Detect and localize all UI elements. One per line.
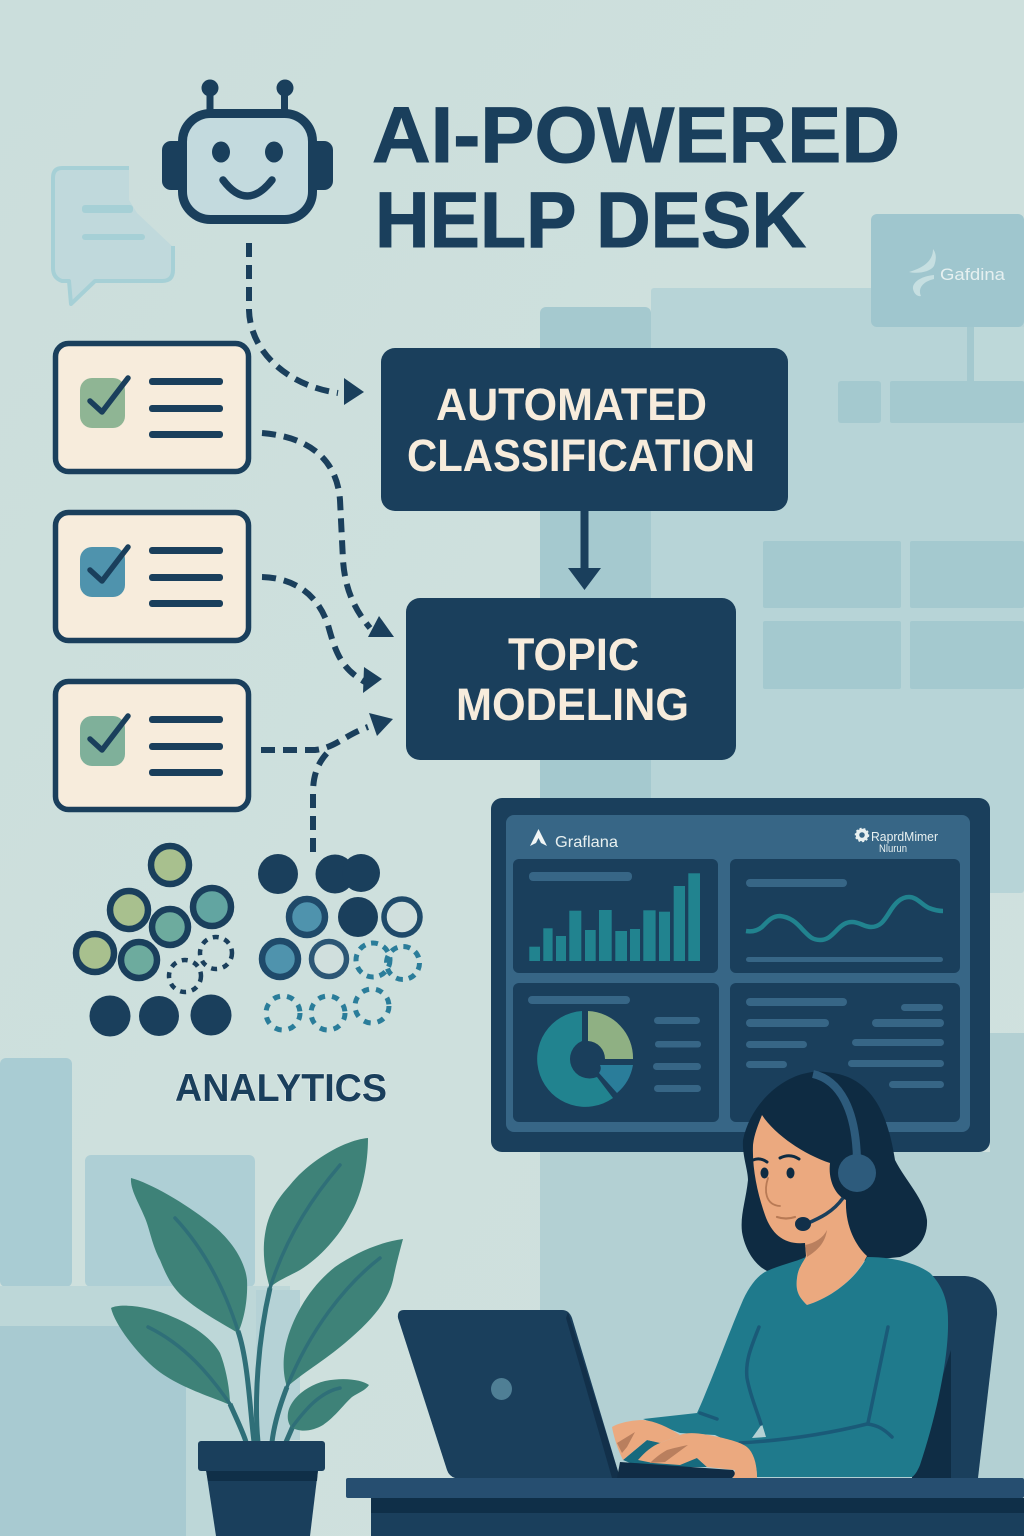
dashed arrow: card 2 to topic modeling: [262, 577, 382, 693]
dashed arrow: robot to automated classification: [249, 243, 364, 405]
dashboard monitor: [491, 798, 990, 1152]
dashed arrow: card 1 to topic modeling: [262, 433, 394, 637]
desk: [346, 1478, 1024, 1536]
shirt: [643, 1257, 948, 1477]
potted plant: [111, 1138, 403, 1536]
dashboard logo: Grafana: Graflana: [555, 834, 618, 851]
neck shadow: [805, 1230, 827, 1257]
shirt fold lines: [700, 1327, 892, 1443]
wall sign: Gafdina: Gafdina: [940, 265, 1006, 284]
dashboard logo: RapidMiner: [856, 828, 939, 855]
face and neck: [753, 1115, 867, 1305]
leaf veins: [148, 1165, 380, 1426]
box: automated classification: [381, 348, 788, 511]
leaves: [111, 1138, 403, 1431]
icon: faded chat bubble: [53, 168, 173, 304]
dashboard logo: RapidMiner: RaprdMimer: [871, 829, 939, 844]
ticket card 1: [56, 344, 248, 472]
ticket card 3: [56, 682, 248, 810]
panel: donut chart: [513, 983, 719, 1122]
dashed connector: analytics upward: [313, 751, 329, 852]
dashed arrow: card 3 to topic modeling: [261, 713, 393, 750]
gap under arm: [752, 1424, 766, 1438]
analytics cluster: left: [76, 846, 232, 1036]
dashboard logo: Grafana: [530, 829, 618, 851]
title: AI-POWERED: [372, 90, 900, 179]
headset: [795, 1074, 876, 1231]
pot: [198, 1441, 325, 1536]
panel: line chart: [730, 859, 960, 973]
hair: [742, 1072, 927, 1271]
title: HELP DESK: [375, 175, 806, 264]
box: topic modeling: MODELING: [456, 679, 689, 730]
label: analytics: ANALYTICS: [175, 1067, 387, 1110]
icon: robot head: [162, 80, 333, 220]
panel: bar chart: [513, 859, 718, 973]
dashboard logo: RapidMiner: Nlurun: [879, 843, 907, 855]
box: topic modeling: TOPIC: [508, 629, 639, 680]
hands on keyboard: [612, 1420, 757, 1478]
panel: text rows: [730, 983, 960, 1122]
stems: [230, 1288, 293, 1442]
box: automated classification: CLASSIFICATION: [407, 430, 755, 481]
title: [372, 90, 900, 264]
analytics cluster: right: [258, 854, 420, 1030]
box: automated classification: AUTOMATED: [436, 379, 707, 430]
laptop: [398, 1310, 735, 1478]
person with headset: [612, 1072, 948, 1478]
arrow: classification to topic modeling: [568, 511, 601, 590]
box: topic modeling: [406, 598, 736, 760]
chair: [912, 1276, 997, 1478]
wall sign: Gafdina: [871, 214, 1024, 327]
facial features: [753, 1156, 799, 1218]
ticket card 2: [56, 512, 248, 640]
